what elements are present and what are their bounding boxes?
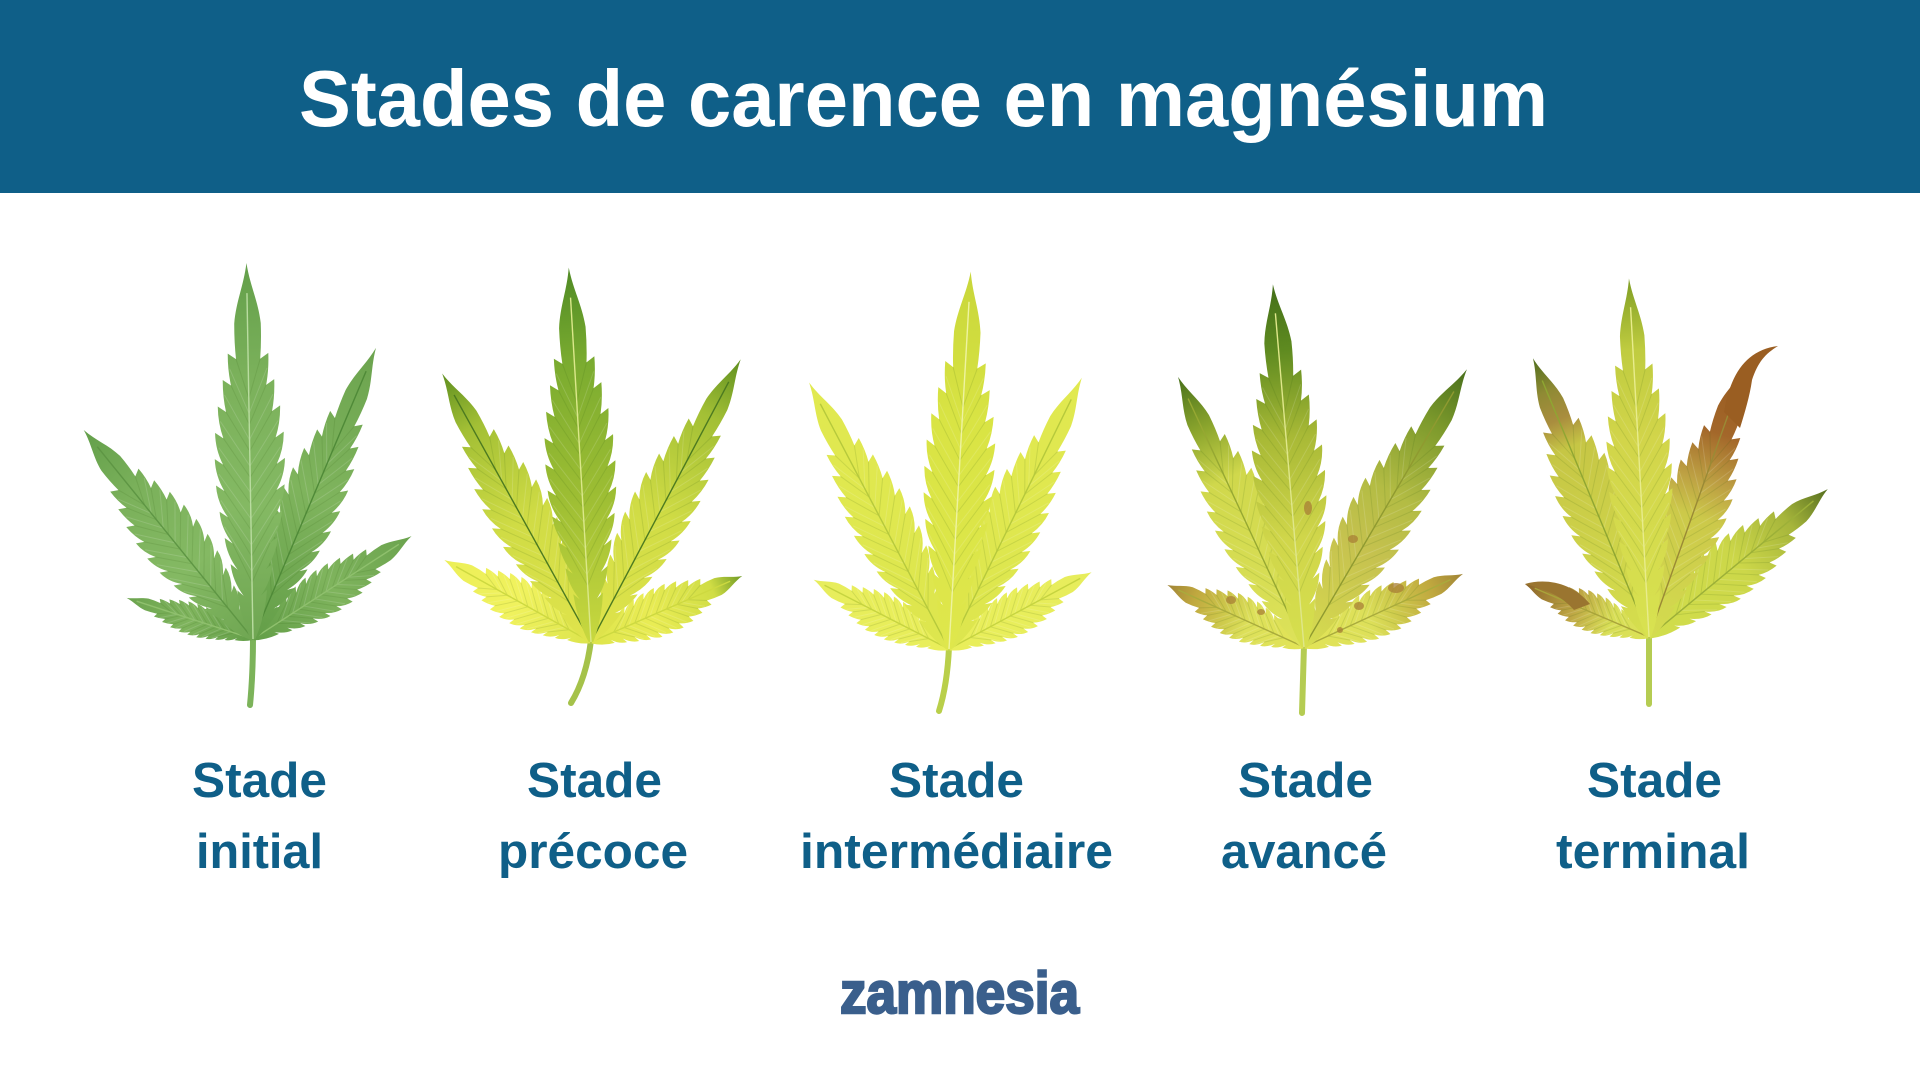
- label: stade intermédiaire: intermédiaire: [800, 825, 1113, 879]
- label: stade initial: [192, 754, 327, 879]
- label: stade intermédiaire: Stade: [889, 754, 1024, 808]
- leaf: stade initial: [59, 262, 424, 705]
- label: stade initial: initial: [196, 825, 323, 879]
- leaf: stade terminal: [1502, 277, 1847, 704]
- label: stade terminal: [1556, 754, 1750, 879]
- label: stade initial: Stade: [192, 754, 327, 808]
- label: stade précoce: précoce: [498, 825, 688, 879]
- center leaflet: [211, 262, 288, 640]
- brown spots: [1226, 501, 1404, 633]
- hooked brown tips: [1525, 346, 1778, 610]
- label: stade précoce: Stade: [527, 754, 662, 808]
- header banner: [0, 0, 1920, 193]
- label: stade intermédiaire: [800, 754, 1113, 879]
- center leaflet: [914, 270, 1006, 651]
- label: stade avancé: [1221, 754, 1387, 879]
- label: stade terminal: terminal: [1556, 825, 1750, 879]
- center leaflet: [1237, 281, 1340, 650]
- label: stade avancé: Stade: [1238, 754, 1373, 808]
- leaf: stade avancé: [1150, 281, 1496, 713]
- center leaflet: [1597, 277, 1681, 639]
- center leaflet: [534, 266, 626, 644]
- label: stade précoce: [498, 754, 688, 879]
- leaf: stade précoce: [415, 266, 769, 703]
- leaf: stade intermédiaire: [781, 270, 1109, 711]
- logo: zamnesia: zamnesia: [840, 961, 1080, 1026]
- title: Stades de carence en magnésium: [299, 54, 1548, 143]
- label: stade terminal: Stade: [1587, 754, 1722, 808]
- label: stade avancé: avancé: [1221, 825, 1387, 879]
